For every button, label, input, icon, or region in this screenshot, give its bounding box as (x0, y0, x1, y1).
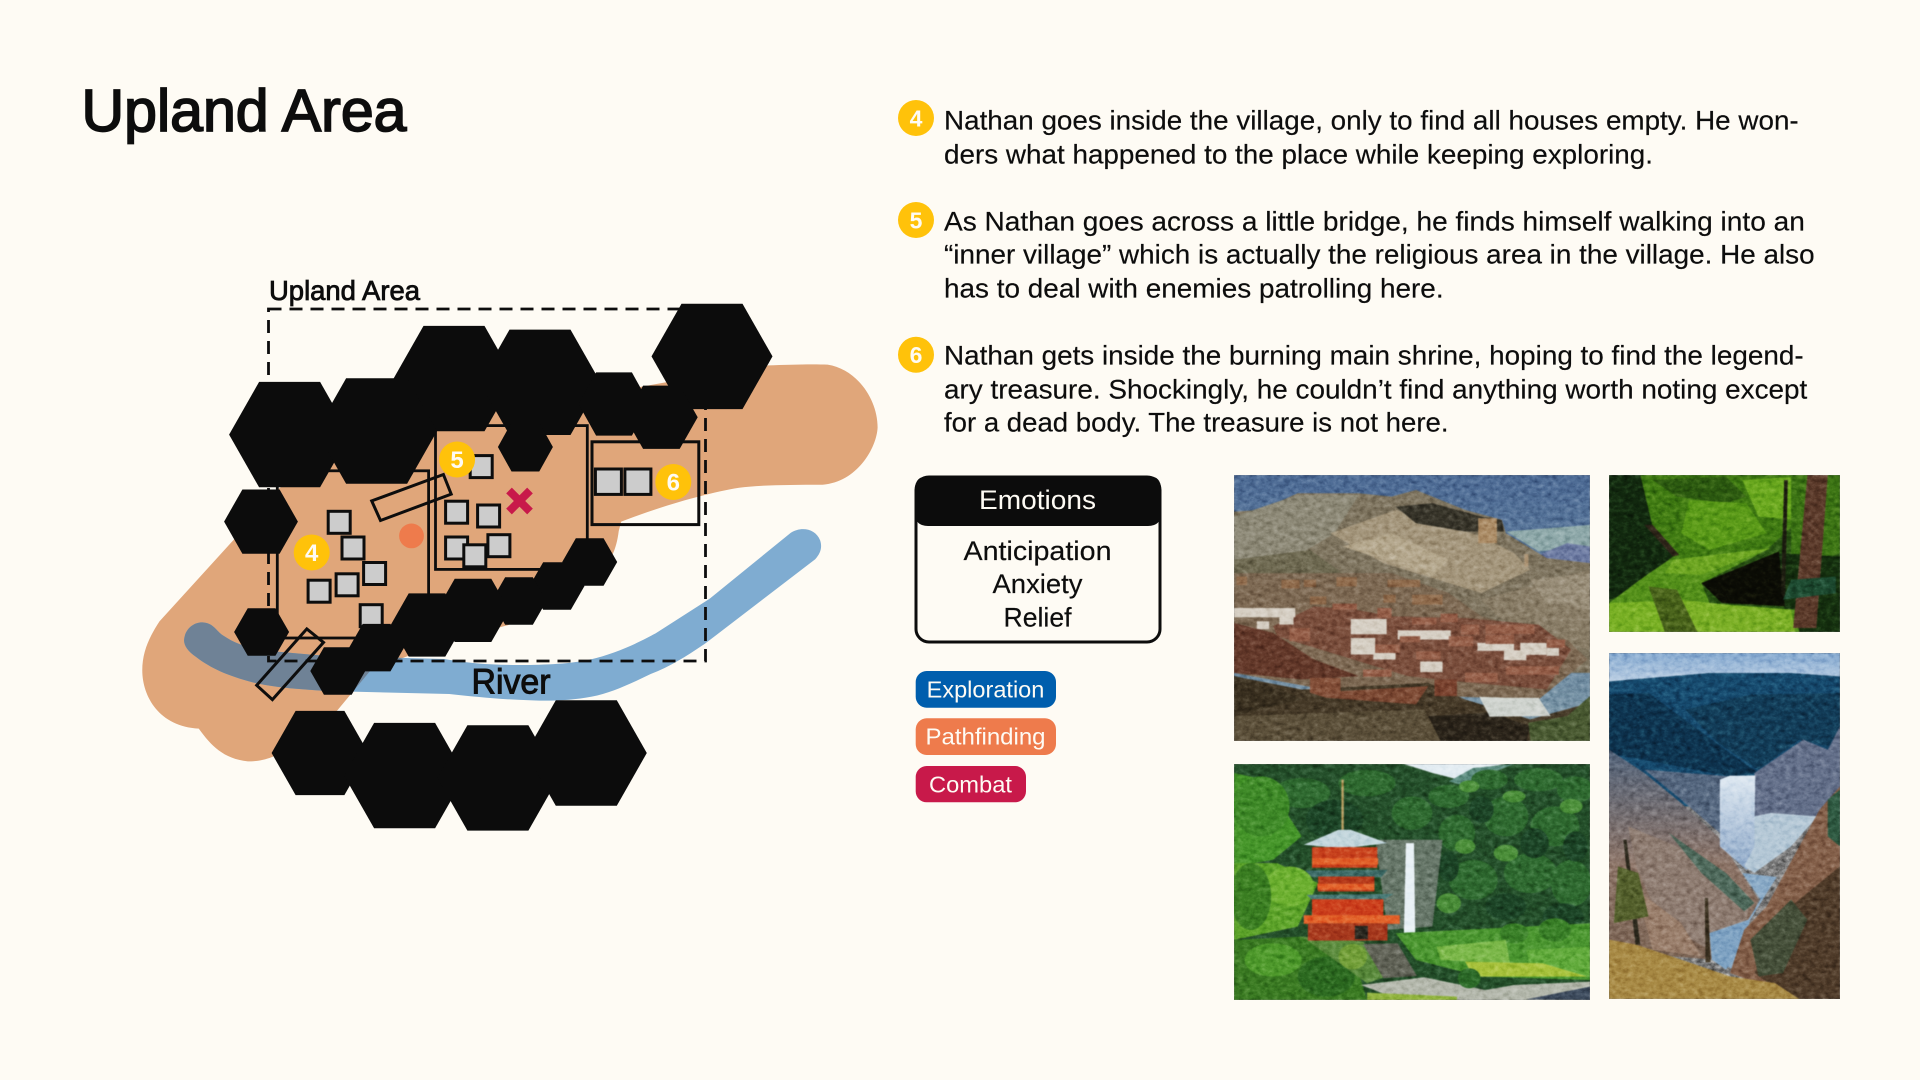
bridge (372, 474, 451, 520)
story step 6: Nathan gets inside the burning main shrine, hoping to find the legend- (944, 341, 1804, 371)
photo: canyon waterfall (1609, 653, 1840, 999)
bridge over river (257, 629, 324, 700)
land mass (142, 364, 878, 761)
story step 5: 5 (910, 207, 923, 233)
tag: combat: Combat (929, 771, 1012, 797)
marker 6: 6 (667, 470, 680, 496)
mountains: upper range (224, 304, 773, 695)
photo: mossy forest (1609, 475, 1840, 632)
story step 6: for a dead body. The treasure is not here. (944, 408, 1448, 438)
map label: river: River (472, 662, 551, 702)
emotions panel (915, 476, 1161, 642)
story step 6: ary treasure. Shockingly, he couldn’t find anything worth noting except (944, 374, 1808, 404)
story step 5: “inner village” which is actually the religious area in the village. He also (944, 240, 1815, 270)
emotions panel: Relief (1004, 602, 1072, 632)
map: upland area (142, 275, 878, 831)
dashed area boundary (268, 309, 706, 661)
river (184, 529, 821, 701)
marker 6 (655, 464, 691, 500)
tag: pathfinding (916, 718, 1056, 755)
zone outline: shrine (592, 442, 699, 525)
marker 4: 4 (305, 540, 319, 567)
story step 4: 4 (910, 105, 923, 131)
houses (308, 456, 651, 627)
story step 5 (898, 202, 1815, 303)
marker 5 (439, 442, 475, 478)
story step 4: Nathan goes inside the village, only to find all houses empty. He won- (944, 105, 1799, 135)
marker 4 (294, 534, 330, 570)
marker: pathfinding point (399, 524, 424, 548)
emotions panel: Emotions (979, 485, 1096, 515)
tag: exploration: Exploration (927, 676, 1044, 702)
story step 6 (898, 337, 1808, 438)
zone outline: village (277, 471, 429, 638)
story step 4 (898, 100, 1799, 169)
tag: exploration (916, 671, 1056, 708)
story step 4: ders what happened to the place while keeping exploring. (944, 139, 1653, 169)
map label: upland area: Upland Area (269, 275, 421, 306)
photo: pagoda and waterfall (1234, 764, 1590, 1000)
river over land overlap (184, 622, 403, 691)
tag: combat (916, 766, 1026, 802)
story step 5: As Nathan goes across a little bridge, he finds himself walking into an (944, 206, 1805, 236)
zone outline: inner village (436, 426, 587, 569)
story step 6: 6 (910, 342, 922, 368)
tag: pathfinding: Pathfinding (926, 724, 1046, 750)
marker: combat cross (509, 490, 530, 512)
title: Upland Area (82, 78, 407, 144)
marker 5: 5 (450, 447, 464, 474)
mountains: lower range (272, 700, 647, 831)
story step 5: has to deal with enemies patrolling here. (944, 273, 1444, 303)
photo: hillside village (1234, 475, 1590, 741)
emotions panel: Anxiety (992, 569, 1083, 599)
emotions panel: Anticipation (964, 536, 1112, 566)
